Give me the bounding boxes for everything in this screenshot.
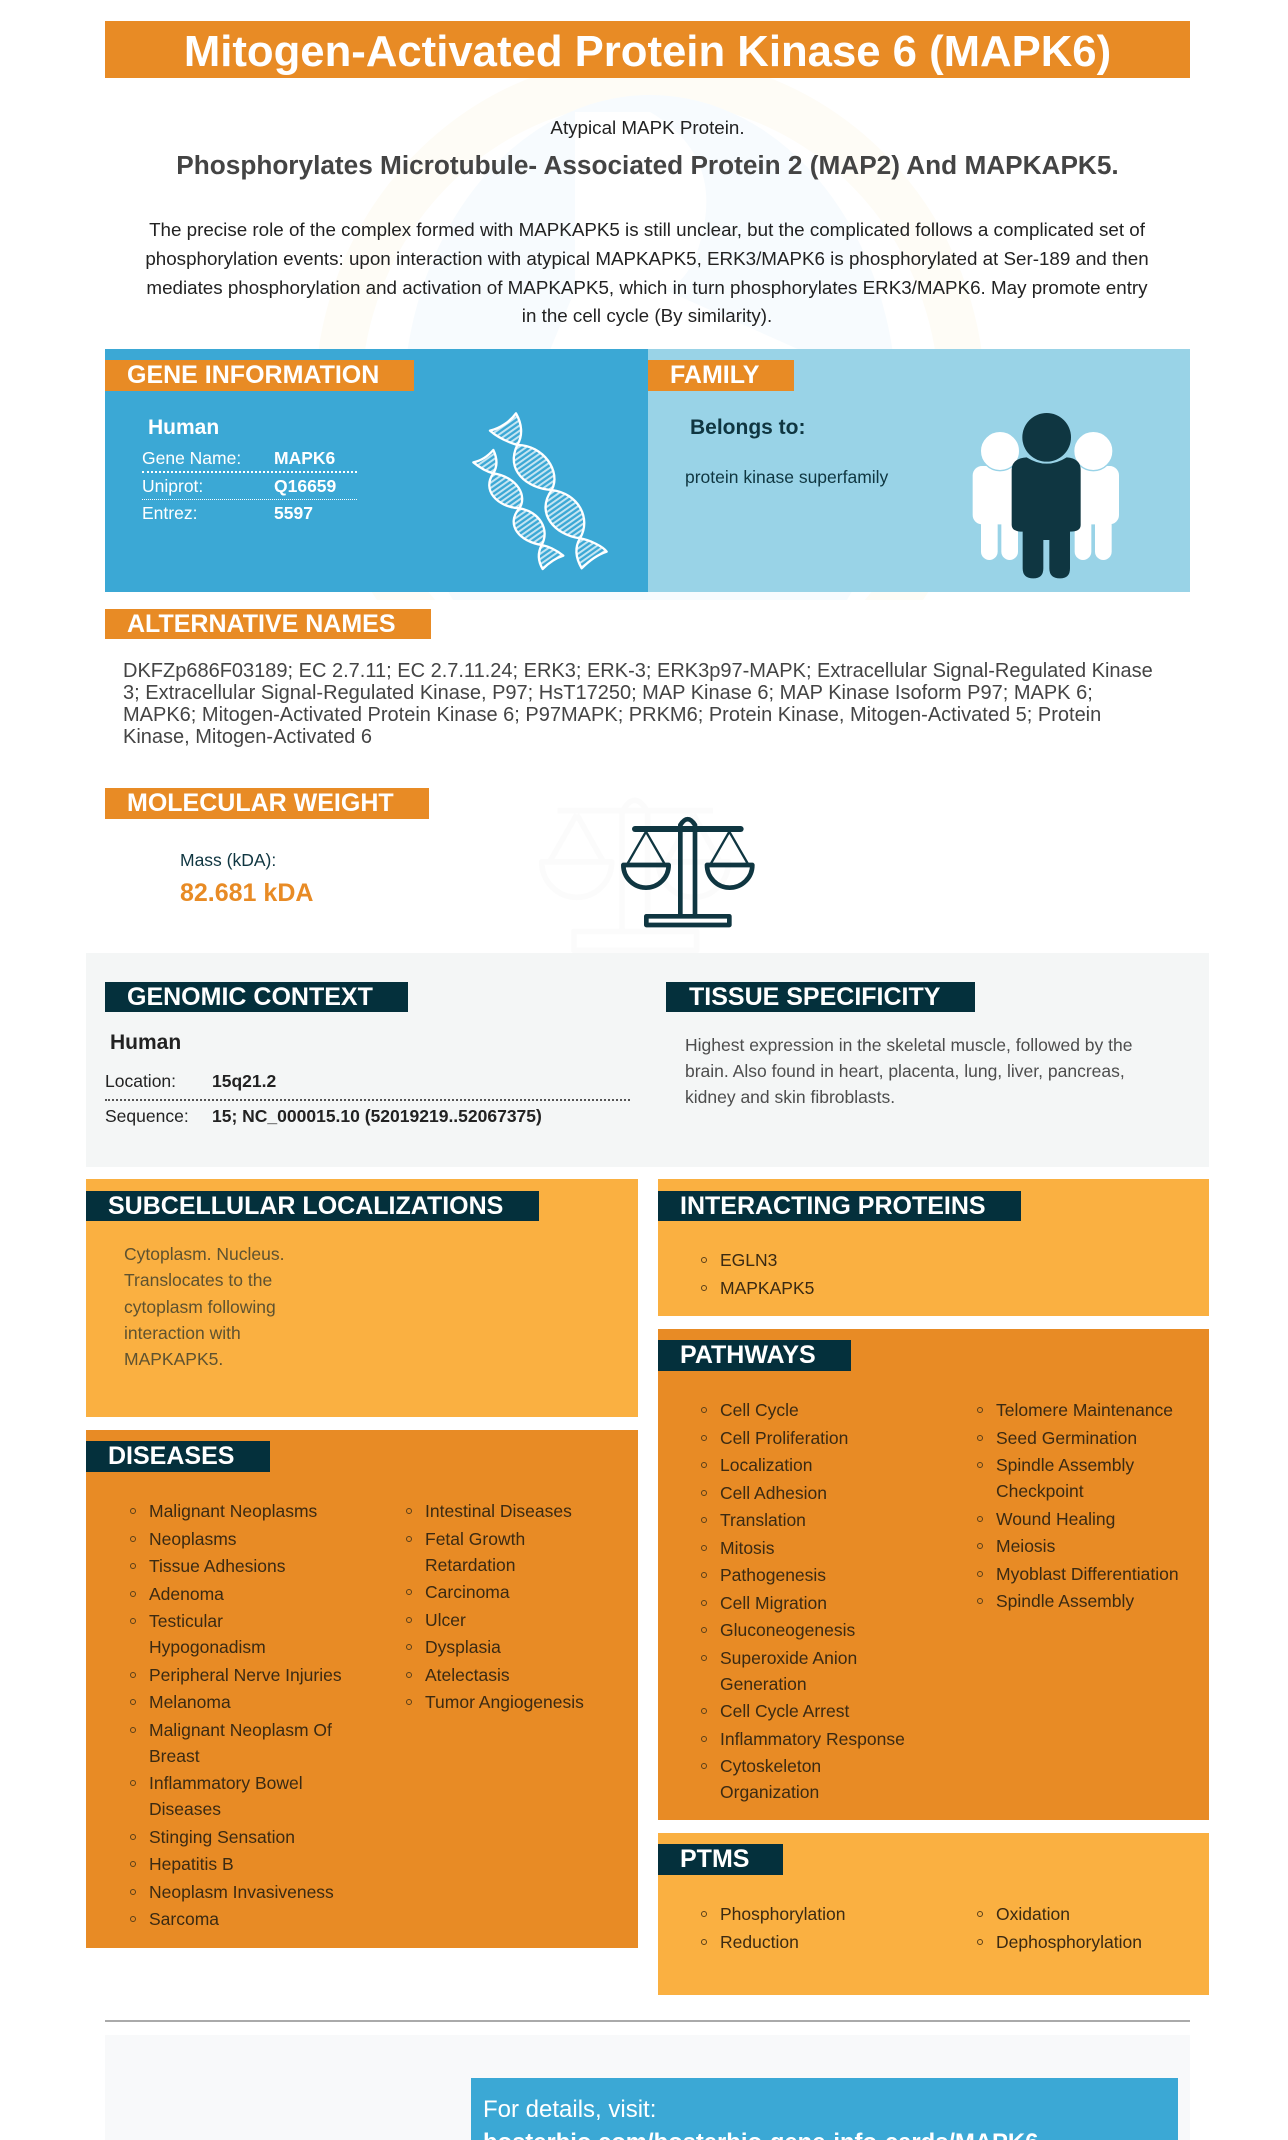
gene name value: MAPK6 xyxy=(274,448,335,468)
species label: Human xyxy=(110,1031,181,1054)
text block: alternative names xyxy=(123,660,1153,748)
title banner: Mitogen-Activated Protein Kinase 6 (MAPK6) xyxy=(184,27,1111,76)
text block: alternative names: MAPK6; Mitogen-Activated Protein Kinase 6; P97MAPK; PRKM6; Protein Kinase, Mitogen-Activated 5; Protein xyxy=(123,704,1101,726)
list: diseases column 2: Intestinal Diseases xyxy=(425,1501,572,1521)
text block: localization description xyxy=(124,1244,284,1369)
list: pathways column 2: Meiosis xyxy=(996,1536,1055,1556)
heading: PTMs xyxy=(658,1844,783,1875)
text block: tissue specificity: kidney and skin fibroblasts. xyxy=(685,1087,895,1107)
list: PTMs column 2 xyxy=(977,1904,1142,1952)
text block: description: in the cell cycle (By similarity). xyxy=(522,305,772,326)
gene name label: Gene Name: xyxy=(142,448,241,468)
sequence value: 15; NC_000015.10 (52019219..52067375) xyxy=(212,1106,542,1126)
text block: tissue specificity: brain. Also found in heart, placenta, lung, liver, pancreas, xyxy=(685,1061,1125,1081)
icon: DNA helices xyxy=(472,412,608,570)
list: pathways column 2: Myoblast Differentiation xyxy=(996,1564,1179,1584)
heading: tissue specificity: TISSUE SPECIFICITY xyxy=(689,983,940,1011)
list: pathways column 2 xyxy=(977,1400,1179,1611)
panel: gene information xyxy=(105,349,648,592)
list: pathways column 1: Cell Cycle xyxy=(720,1400,799,1420)
location value: 15q21.2 xyxy=(212,1071,276,1091)
list: diseases column 2: Dysplasia xyxy=(425,1637,501,1657)
list: pathways column 1: Cell Migration xyxy=(720,1592,827,1612)
panel: PTMs xyxy=(658,1833,1209,1995)
list: pathways column 1: Translation xyxy=(720,1510,806,1530)
panel: genomic context and tissue specificity xyxy=(86,953,1209,1167)
entrez label: Entrez: xyxy=(142,503,197,523)
watermark: faint logo behind intro xyxy=(319,78,981,600)
belongs to label: Belongs to: xyxy=(690,416,806,439)
panel: pathways xyxy=(658,1329,1209,1820)
list: diseases column 1: Malignant Neoplasms xyxy=(149,1501,317,1521)
list: pathways column 1: Localization xyxy=(720,1455,812,1475)
text block: localization description: cytoplasm following xyxy=(124,1297,276,1317)
panel: interacting proteins xyxy=(658,1179,1209,1316)
list: pathways column 1: Organization xyxy=(720,1782,819,1802)
list: diseases column 1: Stinging Sensation xyxy=(149,1826,295,1846)
list: diseases column 1: Malignant Neoplasm Of xyxy=(149,1720,332,1740)
list: PTMs column 1: Reduction xyxy=(720,1932,799,1952)
text block: localization description: Translocates to the xyxy=(124,1270,272,1290)
list: diseases column 2: Retardation xyxy=(425,1554,515,1574)
sequence label: Sequence: xyxy=(105,1106,189,1126)
heading: diseases: DISEASES xyxy=(108,1442,234,1470)
heading: genomic context: GENOMIC CONTEXT xyxy=(127,983,373,1011)
list: pathways column 2: Seed Germination xyxy=(996,1428,1137,1448)
list: pathways column 1: Inflammatory Response xyxy=(720,1728,905,1748)
panel: footer xyxy=(105,2035,1190,2140)
text block: localization description: interaction with xyxy=(124,1323,241,1343)
list: interacting proteins xyxy=(701,1250,814,1298)
heading: family xyxy=(648,360,794,391)
panel: subcellular localizations xyxy=(86,1179,638,1417)
list: diseases column 2: Atelectasis xyxy=(425,1664,510,1684)
location label: Location: xyxy=(105,1071,176,1091)
list: pathways column 1: Mitosis xyxy=(720,1538,774,1558)
list: pathways column 2: Spindle Assembly xyxy=(996,1591,1134,1611)
text block: tissue specificity: Highest expression in the skeletal muscle, followed by the xyxy=(685,1035,1132,1055)
list: diseases column 1: Diseases xyxy=(149,1799,221,1819)
list: diseases column 2: Tumor Angiogenesis xyxy=(425,1692,584,1712)
heading: gene information: GENE INFORMATION xyxy=(127,361,379,389)
list: pathways column 2: Wound Healing xyxy=(996,1508,1115,1528)
mass label: Mass (kDA): xyxy=(180,850,276,870)
panel: family xyxy=(648,349,1190,592)
list: pathways column 1: Cell Proliferation xyxy=(720,1428,848,1448)
species label: Human xyxy=(148,416,219,439)
list: diseases column 1 xyxy=(130,1501,342,1929)
mass value: 82.681 kDA xyxy=(180,879,313,907)
list: pathways column 1: Gluconeogenesis xyxy=(720,1620,855,1640)
list: pathways column 1: Generation xyxy=(720,1674,807,1694)
list: diseases column 1: Melanoma xyxy=(149,1692,231,1712)
heading: pathways xyxy=(658,1340,851,1371)
list: PTMs column 2: Dephosphorylation xyxy=(996,1932,1142,1952)
list: pathways column 1: Cytoskeleton xyxy=(720,1756,821,1776)
heading: pathways: PATHWAYS xyxy=(680,1341,816,1369)
list: PTMs column 2: Oxidation xyxy=(996,1904,1070,1924)
icon: balance scale xyxy=(621,816,755,928)
entrez value: 5597 xyxy=(274,503,313,523)
list: PTMs column 1 xyxy=(701,1904,846,1952)
text block: description: The precise role of the complex formed with MAPKAPK5 is still unclear, but the complicated follows a complicated set of xyxy=(149,219,1145,240)
heading: subcellular localizations: SUBCELLULAR LOCALIZATIONS xyxy=(108,1192,503,1220)
text block: alternative names: 3; Extracellular Signal-Regulated Kinase, P97; HsT17250; MAP Kinase 6; MAP Kinase Isoform P97; MAPK 6; xyxy=(123,682,1093,704)
list: pathways column 1: Cell Adhesion xyxy=(720,1482,827,1502)
list: diseases column 1: Hypogonadism xyxy=(149,1637,266,1657)
subtitle: Atypical MAPK Protein. xyxy=(550,117,745,138)
list: pathways column 1: Cell Cycle Arrest xyxy=(720,1701,849,1721)
list: diseases column 1: Neoplasm Invasiveness xyxy=(149,1882,334,1902)
list: diseases column 1: Testicular xyxy=(149,1611,223,1631)
list: pathways column 1 xyxy=(701,1400,905,1802)
list: diseases column 1: Neoplasms xyxy=(149,1528,237,1548)
list: pathways column 1: Pathogenesis xyxy=(720,1565,826,1585)
list: diseases column 1: Peripheral Nerve Injuries xyxy=(149,1664,342,1684)
list: interacting proteins: MAPKAPK5 xyxy=(720,1278,814,1298)
heading: molecular weight: MOLECULAR WEIGHT xyxy=(127,789,394,817)
list: diseases column 1: Breast xyxy=(149,1746,200,1766)
text: for details: For details, visit: xyxy=(483,2096,656,2123)
list: diseases column 1: Tissue Adhesions xyxy=(149,1556,286,1576)
callout: details link xyxy=(471,2078,1178,2140)
text block: tissue specificity xyxy=(685,1035,1132,1107)
list: diseases column 2 xyxy=(406,1501,584,1712)
list: diseases column 1: Adenoma xyxy=(149,1584,224,1604)
list: diseases column 1: Inflammatory Bowel xyxy=(149,1773,303,1793)
text block: alternative names: Kinase, Mitogen-Activated 6 xyxy=(123,726,372,748)
panel: diseases xyxy=(86,1430,638,1948)
text block: description xyxy=(145,219,1149,326)
list: diseases column 1: Hepatitis B xyxy=(149,1854,234,1874)
heading: alternative names: ALTERNATIVE NAMES xyxy=(127,610,396,638)
list: pathways column 1: Superoxide Anion xyxy=(720,1648,857,1668)
uniprot label: Uniprot: xyxy=(142,476,203,496)
list: diseases column 2: Ulcer xyxy=(425,1610,466,1630)
text block: alternative names: DKFZp686F03189; EC 2.7.11; EC 2.7.11.24; ERK3; ERK-3; ERK3p97-MAPK; Extracellular Signal-Regulated Kinase xyxy=(123,660,1153,682)
list: pathways column 2: Checkpoint xyxy=(996,1481,1084,1501)
family value: protein kinase superfamily xyxy=(685,467,888,487)
list: diseases column 2: Fetal Growth xyxy=(425,1528,525,1548)
text block: localization description: Cytoplasm. Nucleus. xyxy=(124,1244,284,1264)
list: pathways column 2: Spindle Assembly xyxy=(996,1455,1134,1475)
heading: diseases xyxy=(86,1441,270,1472)
heading: interacting proteins: INTERACTING PROTEINS xyxy=(680,1192,986,1220)
list: interacting proteins: EGLN3 xyxy=(720,1250,777,1270)
list: diseases column 1: Sarcoma xyxy=(149,1909,219,1929)
icon: group of people xyxy=(972,413,1119,578)
heading: family: FAMILY xyxy=(670,361,759,389)
list: pathways column 2: Telomere Maintenance xyxy=(996,1400,1173,1420)
heading: function summary: Phosphorylates Microtubule- Associated Protein 2 (MAP2) And MAPKAPK5. xyxy=(176,150,1119,180)
text block: description: phosphorylation events: upon interaction with atypical MAPKAPK5, ERK3/MAPK6 is phosphorylated at Ser-189 and then xyxy=(145,248,1149,269)
list: PTMs column 1: Phosphorylation xyxy=(720,1904,846,1924)
text block: localization description: MAPKAPK5. xyxy=(124,1349,223,1369)
heading: PTMs: PTMS xyxy=(680,1845,749,1873)
text block: description: mediates phosphorylation and activation of MAPKAPK5, which in turn phosphorylates ERK3/MAPK6. May promote entry xyxy=(146,277,1148,298)
list: diseases column 2: Carcinoma xyxy=(425,1582,510,1602)
uniprot value: Q16659 xyxy=(274,476,336,496)
